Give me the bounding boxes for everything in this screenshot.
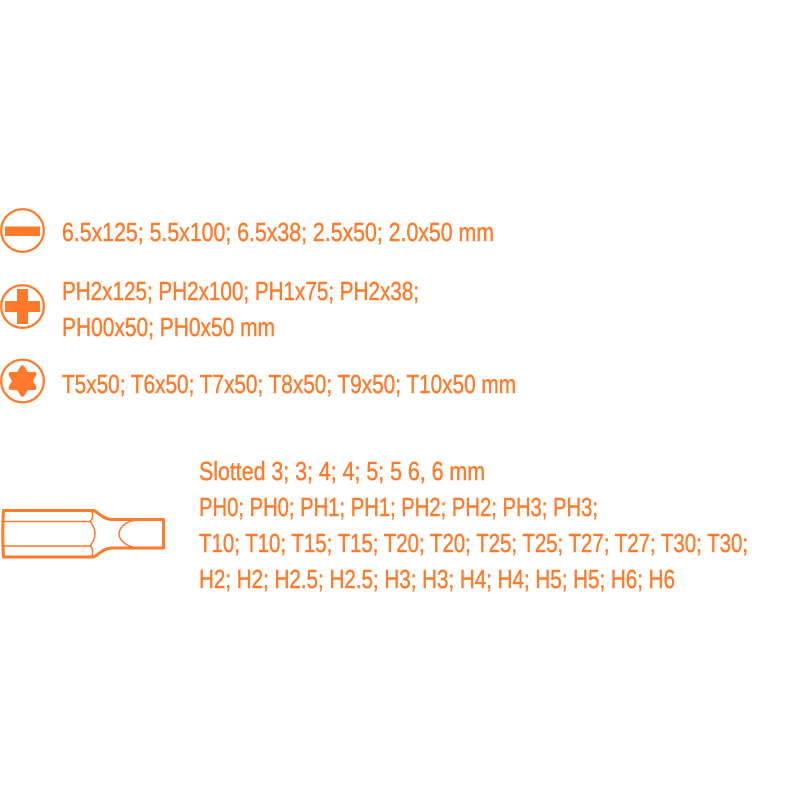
icon: phillips screw head [1, 285, 44, 328]
icon: screwdriver bit [3, 510, 164, 557]
icon: torx screw head [1, 360, 44, 402]
text: slotted sizes: 6.5x125; 5.5x100; 6.5x38; 2.5x50; 2.0x50 mm [62, 217, 494, 247]
text: phillips sizes [62, 276, 419, 342]
text: phillips sizes: PH2x125; PH2x100; PH1x75; PH2x38; [62, 276, 419, 306]
text: bit sizes [199, 456, 748, 594]
text: torx sizes: T5x50; T6x50; T7x50; T8x50; T9x50; T10x50 mm [62, 369, 516, 399]
text: bit sizes: Slotted 3; 3; 4; 4; 5; 5 6, 6 mm [199, 456, 485, 486]
text: phillips sizes: PH00x50; PH0x50 mm [62, 312, 275, 342]
text: bit sizes: PH0; PH0; PH1; PH1; PH2; PH2; PH3; PH3; [199, 492, 598, 522]
text: bit sizes: H2; H2; H2.5; H2.5; H3; H3; H4; H4; H5; H5; H6; H6 [199, 564, 675, 594]
icon: slotted screw head [1, 209, 44, 252]
